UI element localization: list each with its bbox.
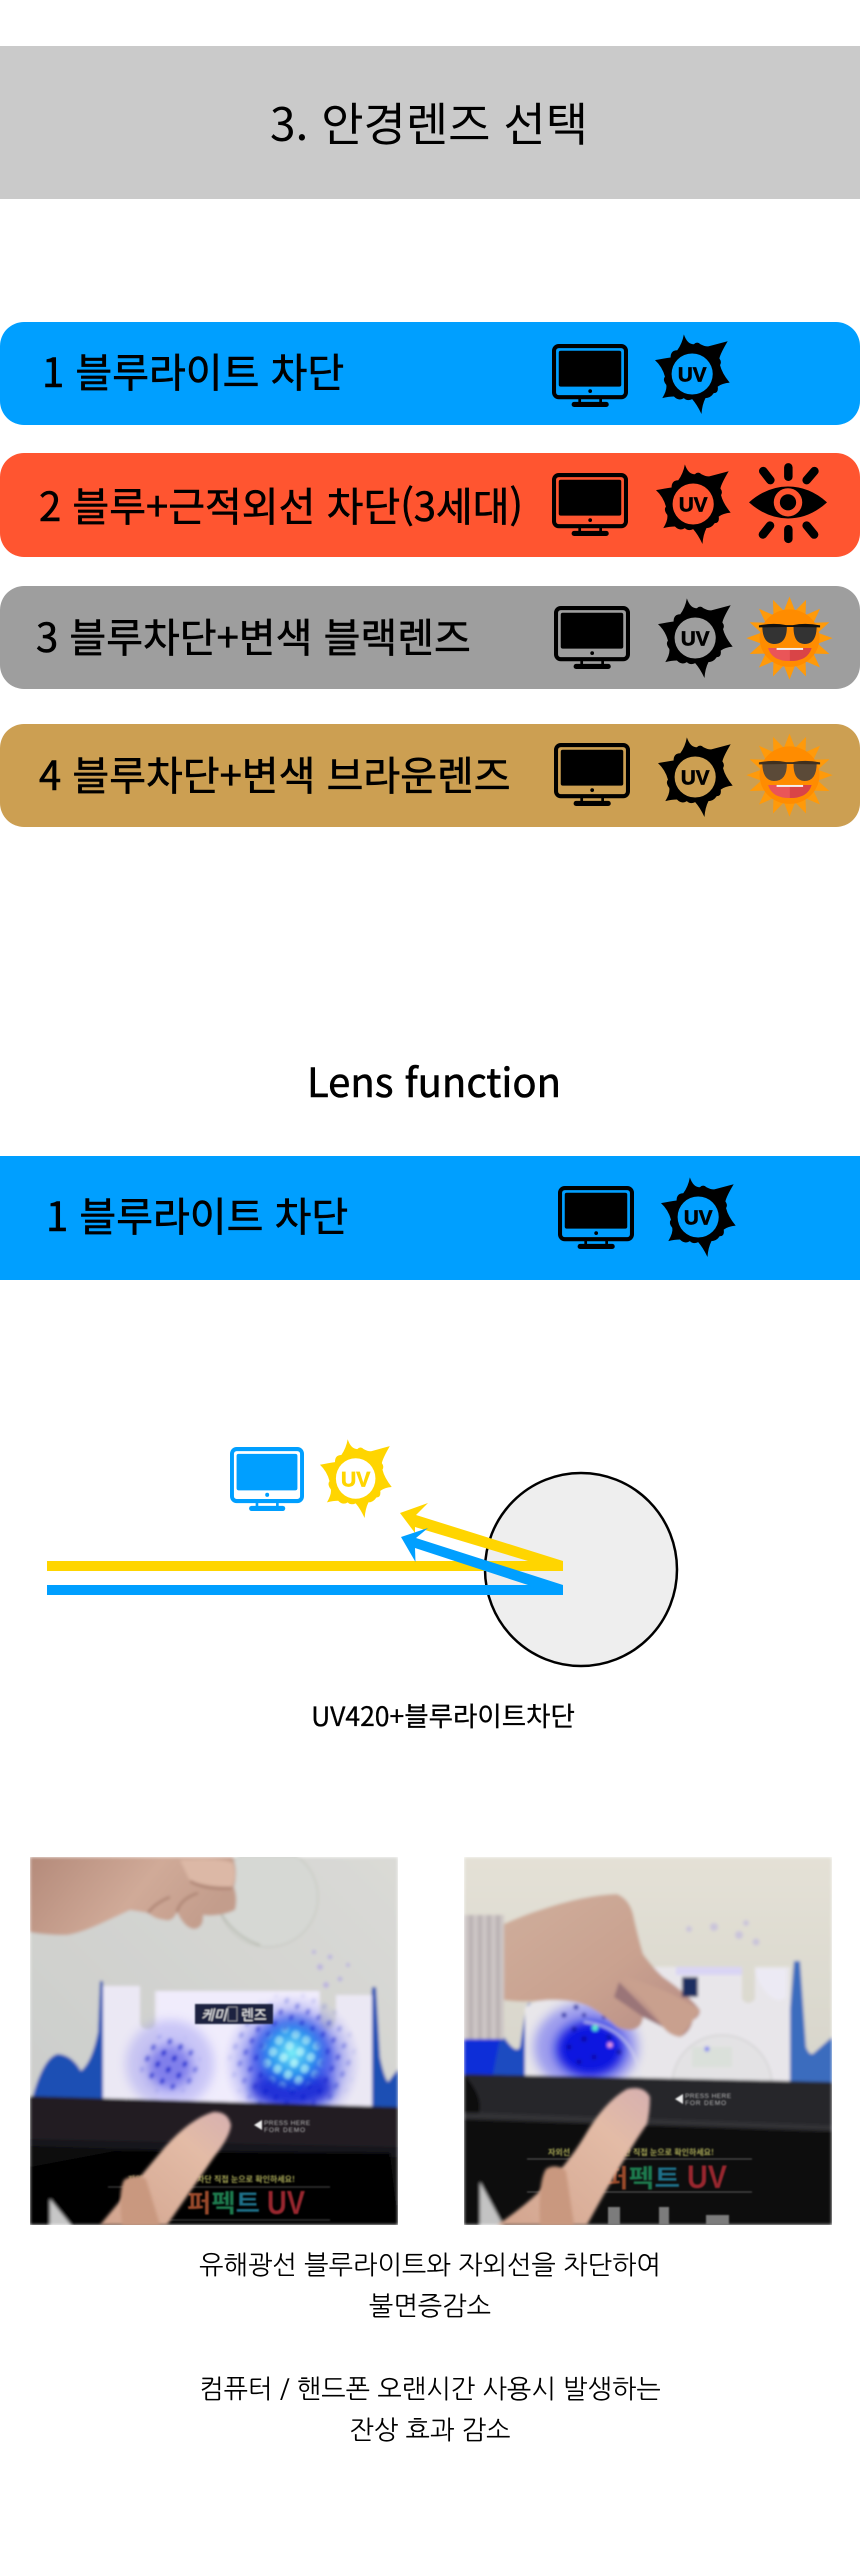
blurred photo scene: [464, 1857, 832, 2225]
icon: UV sun: UV: [679, 493, 708, 516]
tester device: [464, 2072, 832, 2128]
device labels: PRESS HERE: [685, 2093, 732, 2100]
option 2 label: 2 블루+근적외선 차단(3세대): [39, 475, 523, 533]
option bar 3: blue + photochromic black: [0, 586, 860, 689]
device labels: FOR DEMO: [264, 2127, 306, 2134]
logo plate: [195, 2004, 273, 2025]
device labels: [527, 2093, 752, 2225]
icon: UV sun: [658, 738, 733, 817]
pressing finger: [497, 2088, 650, 2225]
hand holding lens: [30, 1857, 236, 1935]
clear lens on right: [672, 2034, 772, 2080]
icon: sun with black sunglasses: [746, 596, 832, 680]
violet specks on wall: [312, 1950, 350, 1988]
line 3: 컴퓨터 / 핸드폰 오랜시간 사용시 발생하는: [199, 2376, 661, 2402]
logo plate: 케미: [201, 2005, 228, 2025]
white card: [103, 1986, 372, 2107]
icon: UV sun: [661, 1178, 736, 1257]
knuckle: [120, 2176, 160, 2225]
option 3 label: 3 블루차단+변색 블랙렌즈: [36, 606, 471, 664]
device labels: 퍼펙트: [187, 2184, 260, 2220]
photo 2: lens covering one UV spot: [464, 1857, 832, 2225]
device labels: 퍼펙트: [603, 2159, 680, 2195]
header band: [0, 46, 860, 199]
icon: sun with brown sunglasses: [746, 734, 832, 816]
left glow: [126, 2020, 214, 2108]
icon: blue monitor: [230, 1447, 304, 1511]
line 2: 불면증감소: [369, 2293, 491, 2319]
pressing finger: [100, 2112, 231, 2225]
option bar 1: blue light: [0, 322, 860, 425]
section band: blue light: [0, 1156, 860, 1280]
hand holding lens: [504, 1894, 700, 2037]
icon: monitor: [554, 743, 630, 806]
blue acrylic holder: [489, 2002, 532, 2078]
icon: UV sun: [656, 464, 731, 544]
clear lens on left: [582, 2019, 636, 2060]
blue incoming ray: [47, 1585, 563, 1595]
line 4: 잔상 효과 감소: [349, 2417, 511, 2443]
line 1: 유해광선 블루라이트와 자외선을 차단하여: [199, 2252, 661, 2278]
lens diagram: [47, 1472, 678, 1668]
option 4 label: 4 블루차단+변색 브라운렌즈: [39, 744, 511, 802]
device labels: PRESS HERE: [264, 2120, 311, 2127]
description text: [199, 2252, 661, 2443]
held lens: [237, 1857, 300, 1858]
white card: [525, 1967, 790, 2082]
icon: UV sun: UV: [684, 1206, 713, 1229]
device labels: 자외선: [128, 2174, 150, 2185]
section band label: 1 블루라이트 차단: [46, 1185, 348, 1243]
tester device: [30, 2094, 398, 2150]
diagram caption: UV420+블루라이트차단: [311, 1695, 575, 1734]
option bar 4: blue + photochromic brown: [0, 724, 860, 827]
icon: UV sun: UV: [681, 766, 710, 789]
device labels: UV: [267, 2184, 305, 2221]
icon: monitor: [552, 344, 628, 407]
yellow incoming ray: [47, 1561, 563, 1571]
icon: UV sun: [658, 598, 733, 678]
photo 1: lens held above UV tester: [30, 1857, 398, 2225]
icon: yellow UV sun: [320, 1439, 392, 1518]
device labels: FOR DEMO: [685, 2100, 727, 2107]
icon: yellow UV sun: UV: [341, 1467, 371, 1491]
logo fragment: [682, 1977, 698, 1997]
option bar 2: blue + near infrared: [0, 453, 860, 557]
icon: eye with rays: [749, 463, 827, 544]
lens circle: [485, 1473, 677, 1666]
icon: monitor: [552, 473, 628, 536]
device labels: 차단 직접 눈으로 확인하세요!: [616, 2147, 714, 2158]
section heading: Lens function: Lens function: [307, 1051, 561, 1109]
striped sleeve: [464, 1915, 504, 2039]
deep blue glow: [534, 2003, 638, 2091]
blue acrylic holder: [30, 1981, 398, 2109]
device labels: [108, 2120, 330, 2221]
icon: monitor: [558, 1186, 634, 1249]
blurred photo scene: [30, 1847, 398, 2225]
icon: UV sun: [655, 334, 730, 414]
blue reflected arrow: [401, 1528, 563, 1595]
option 1 label: 1 블루라이트 차단: [42, 341, 344, 399]
logo plate: 렌즈: [241, 2005, 267, 2025]
right glow: [226, 1997, 358, 2108]
device labels: UV: [687, 2159, 728, 2195]
device labels: 차단 직접 눈으로 확인하세요!: [197, 2174, 295, 2185]
title: 3. 안경렌즈 선택: [270, 89, 588, 155]
yellow reflected arrow: [400, 1503, 563, 1571]
violet specks on wall: [686, 1920, 760, 1946]
knuckle: [540, 2166, 574, 2225]
icon: UV sun: UV: [681, 627, 710, 650]
icon: monitor: [554, 606, 630, 669]
icon: UV sun: UV: [678, 363, 707, 386]
device labels: 자외선: [548, 2147, 570, 2158]
